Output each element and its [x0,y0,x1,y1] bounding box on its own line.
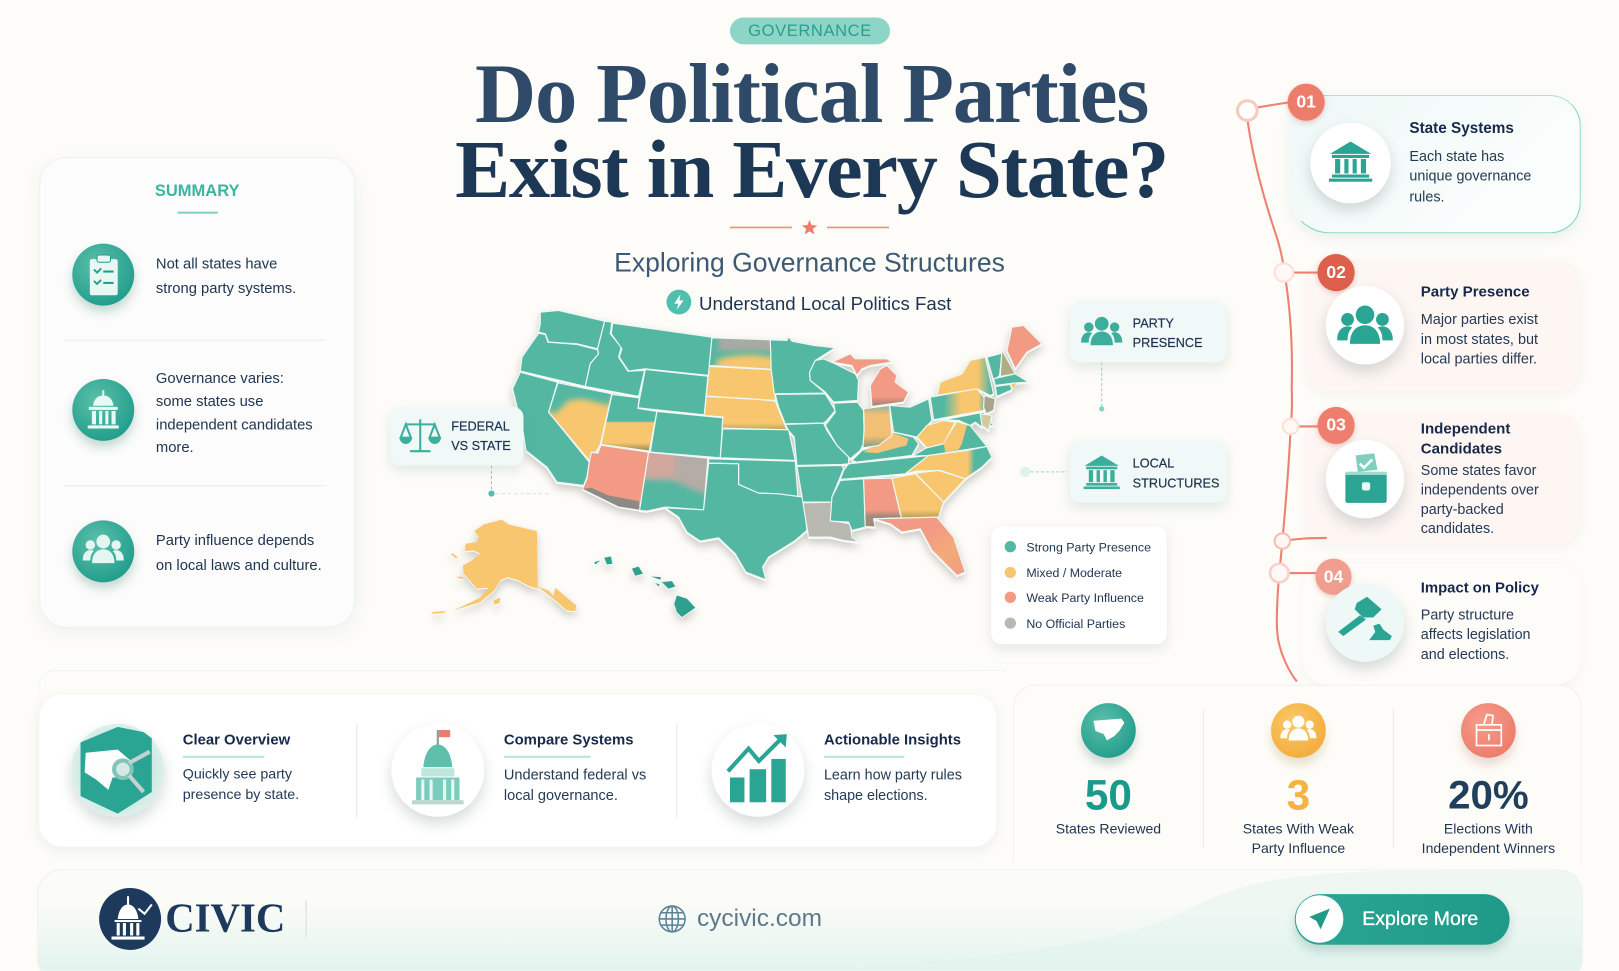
icon: party presence people [1326,286,1404,364]
tag pill: governance [730,18,890,44]
benefit text: compare systems [504,732,646,803]
legend: weak party influence: Weak Party Influence [1026,591,1144,605]
panel: summary [39,157,355,628]
card 1: state systems [1289,95,1581,233]
button: explore more [1295,894,1510,945]
summary text 2: Governance varies: [156,371,284,387]
callout: local structures [1070,441,1227,503]
card title: Candidates [1421,441,1502,458]
button icon [1296,895,1343,943]
title line 2: Exist in Every State? [455,125,1168,216]
card 4: impact on policy [1303,563,1581,685]
summary text 3: Party influence depends [156,533,314,549]
summary text 2 [156,371,313,456]
badge 01 [1288,84,1325,121]
eastern states [770,325,1042,575]
badge 02: 02 [1326,262,1346,282]
benefit text: clear overview: presence by state. [183,787,299,802]
card text [1421,606,1531,661]
stat label: States With Weak [1243,821,1354,836]
callout: federal vs state [390,407,523,466]
callout text: FEDERAL [451,419,510,434]
card title: Impact on Policy [1421,580,1539,597]
connector: federal vs state [488,466,548,497]
icon: gavel [1326,583,1404,662]
card 2: party presence [1305,259,1581,391]
stat: states reviewed [1056,703,1161,836]
legend: mixed moderate: Mixed / Moderate [1026,566,1122,580]
badge 04: 04 [1324,567,1343,586]
card title: Independent [1421,421,1510,438]
stat icon: ballot [1461,703,1516,758]
stat: independent winners [1422,703,1555,856]
icon: ballot box [1326,440,1404,518]
benefit text: actionable insights: Learn how party rules [824,766,962,783]
summary text 2: independent candidates [156,417,313,433]
callout text: PARTY [1133,316,1174,330]
summary text 2: some states use [156,394,263,410]
icon: people [72,520,134,582]
legend: strong party presence: Strong Party Presence [1026,540,1151,554]
connector: local structures [1020,466,1068,477]
legend [991,527,1167,644]
stat label: States Reviewed [1056,821,1161,836]
badge 01: 01 [1296,92,1316,112]
benefit text: clear overview: Quickly see party [183,766,292,782]
summary heading: SUMMARY [155,183,240,200]
map of the United States [432,310,1044,624]
icon: clear overview [71,724,164,817]
panel: footer [37,869,1583,971]
card title: State Systems [1409,121,1514,137]
card text: candidates. [1421,520,1494,536]
card text: and elections. [1421,645,1509,661]
alaska and hawaii [432,519,695,617]
benefit text: actionable insights: shape elections. [824,787,928,803]
card 3: independent candidates [1305,412,1581,544]
benefit text: clear overview [182,732,299,802]
card text [1421,311,1538,367]
callout text: PRESENCE [1133,336,1203,350]
summary text 2: more. [156,440,194,456]
card text: unique governance [1409,168,1531,184]
timeline connector [1236,99,1327,682]
stat icon: people [1271,703,1326,758]
badge 04 [1315,559,1352,595]
stat value: 50 [1085,771,1132,819]
title line 1: Do Political Parties [475,46,1148,140]
card text [1421,462,1539,536]
icon: scales [399,419,442,452]
divider with star [730,220,889,234]
logo mark [99,888,161,950]
stat icon: usa [1081,703,1136,758]
panel: benefits [39,695,996,847]
summary text 1: strong party systems. [156,281,296,297]
benefit text: clear overview: Clear Overview [183,732,290,749]
website text: cycivic.com [697,906,822,932]
summary text 3 [156,533,322,574]
callout: party presence [1070,301,1227,362]
icon: globe [658,905,686,933]
benefit text: actionable insights [824,732,962,803]
callout text [1133,456,1219,490]
logo: civic [99,888,285,950]
logo wordmark: CIVIC [165,895,285,941]
connector: party presence [1099,362,1104,412]
card text: rules. [1409,188,1444,204]
card text: Each state has [1409,148,1504,164]
callout text: VS STATE [451,439,511,453]
button label: Explore More [1362,909,1478,930]
stat label: Elections With [1444,821,1533,836]
card text: affects legislation [1421,626,1531,642]
benefit text: compare systems: Compare Systems [504,732,634,749]
card text: in most states, but [1421,331,1538,347]
stat label [1422,821,1555,856]
benefit text: actionable insights: Actionable Insights [824,732,961,749]
card text: party-backed [1421,500,1504,517]
stat label: Party Influence [1252,840,1345,856]
card text: local parties differ. [1421,350,1537,367]
legend: no official parties: No Official Parties [1026,616,1125,631]
panel: stats [1013,685,1582,862]
stat label: Independent Winners [1422,840,1555,856]
callout text: LOCAL [1133,456,1174,471]
tag pill: governance: GOVERNANCE [748,23,872,40]
subtitle: Exploring Governance Structures [614,249,1005,278]
summary underline [178,212,218,214]
icon: actionable insights chart [711,724,804,817]
callout text: STRUCTURES [1133,476,1219,490]
card text: Major parties exist [1421,311,1538,327]
card text [1409,148,1531,204]
benefit text: compare systems: Understand federal vs [504,766,646,783]
card title: Party Presence [1421,284,1530,300]
callout text [1133,316,1203,350]
icon: capitol [72,379,134,441]
stat label [1243,821,1354,856]
tagline with bolt icon: Understand Local Politics Fast [699,293,951,314]
benefit text: compare systems: local governance. [504,787,618,803]
summary text 1: Not all states have [156,256,277,273]
icon: bank [1084,456,1120,490]
card title [1421,421,1510,458]
summary text 3: on local laws and culture. [156,558,322,574]
icon: checklist [72,244,134,306]
badge 03: 03 [1326,415,1346,435]
card text: Party structure [1421,606,1514,623]
icon: state systems bank [1310,123,1391,203]
badge 03 [1318,407,1355,444]
stat value: 20% [1448,773,1529,818]
icon: people [1081,316,1122,346]
stat: weak influence [1243,703,1354,856]
title [455,46,1168,216]
card text: Some states favor [1421,462,1536,478]
card text: independents over [1421,481,1539,497]
badge 02 [1318,254,1355,291]
icon: compare systems capitol [391,724,484,817]
callout text [451,419,511,453]
stat value: 3 [1287,771,1310,819]
summary text 1 [156,256,296,297]
western states [512,310,807,579]
website link [658,905,822,933]
